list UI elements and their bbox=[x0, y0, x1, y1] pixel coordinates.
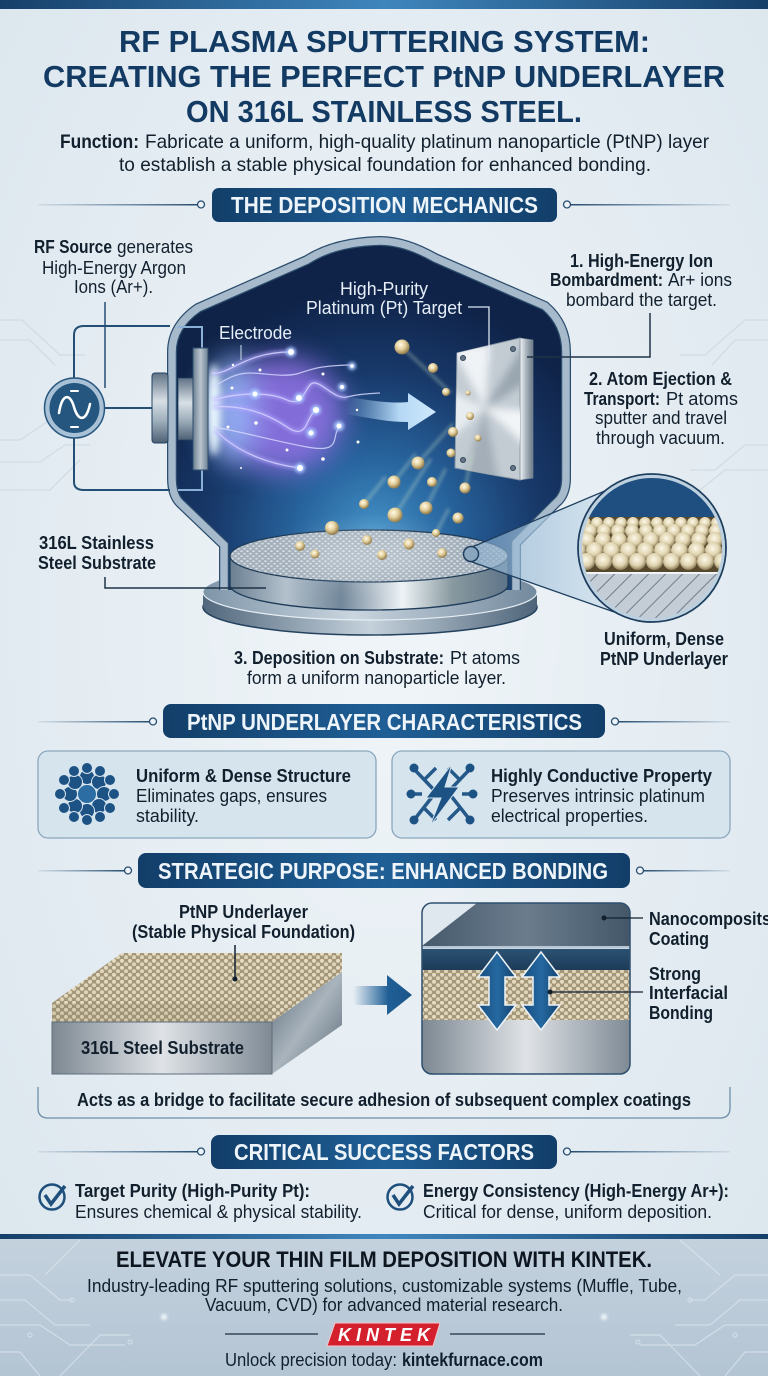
label: step 2: sputter and travel bbox=[595, 408, 727, 428]
sputtered platinum atoms bbox=[295, 340, 482, 560]
arrow: bonding left bbox=[478, 952, 516, 1030]
label: step 2 bbox=[584, 369, 738, 448]
label: step 1: Ar+ ions bbox=[668, 270, 732, 290]
panel: highly conductive property: Highly Conductive Property bbox=[491, 766, 712, 786]
magnifier cone bbox=[472, 490, 637, 620]
title: ON 316L STAINLESS STEEL. bbox=[186, 94, 582, 129]
footer description: Vacuum, CVD) for advanced material research. bbox=[205, 1295, 563, 1315]
title bbox=[43, 24, 725, 129]
function statement: to establish a stable physical foundation for enhanced bonding. bbox=[119, 154, 651, 176]
label: RF source bbox=[34, 237, 193, 388]
label: step 3: form a uniform nanoparticle layer. bbox=[247, 668, 506, 688]
label: underlayer foundation bbox=[132, 902, 355, 942]
icon: conductive network bbox=[406, 764, 478, 826]
function statement: Function: bbox=[60, 131, 139, 153]
section header: characteristics bbox=[38, 704, 730, 738]
label: interfacial bonding: Bonding bbox=[649, 1003, 713, 1023]
label: step 2: 2. Atom Ejection & bbox=[589, 369, 732, 389]
section header: strategic purpose: STRATEGIC PURPOSE: ENHANCED BONDING bbox=[158, 858, 608, 884]
factor: energy consistency: Critical for dense, uniform deposition. bbox=[423, 1202, 712, 1222]
section header: deposition mechanics bbox=[38, 188, 730, 222]
label: uniform underlayer bbox=[600, 629, 728, 669]
label: step 1: 1. High-Energy Ion bbox=[570, 251, 713, 271]
leader: underlayer bbox=[232, 945, 238, 982]
label: step 1: Bombardment: bbox=[550, 270, 663, 290]
electrode bracket bbox=[178, 327, 202, 490]
footer call to action: kintekfurnace.com bbox=[402, 1350, 543, 1370]
label: electrode bbox=[219, 323, 292, 360]
section header: critical success factors bbox=[38, 1135, 730, 1169]
label: step 2: Pt atoms bbox=[666, 389, 738, 409]
title: RF PLASMA SPUTTERING SYSTEM: bbox=[119, 24, 650, 59]
section header: strategic purpose bbox=[38, 853, 730, 888]
label: RF source: generates bbox=[117, 237, 193, 257]
label: step 3 bbox=[234, 648, 520, 688]
callout: bridge statement: Acts as a bridge to facilitate secure adhesion of subsequent complex coatings bbox=[77, 1090, 691, 1110]
footer description bbox=[87, 1276, 682, 1315]
panel: highly conductive property: Preserves intrinsic platinum bbox=[491, 786, 705, 806]
footer heading: ELEVATE YOUR THIN FILM DEPOSITION WITH KINTEK. bbox=[116, 1247, 652, 1272]
plasma sparks bbox=[226, 347, 360, 473]
RF source wiring bbox=[74, 326, 170, 490]
magnifier origin bbox=[464, 546, 478, 562]
label: interfacial bonding: Strong bbox=[649, 964, 701, 984]
platinum target bbox=[454, 337, 534, 481]
footer call to action bbox=[225, 1350, 543, 1370]
label: underlayer foundation: PtNP Underlayer bbox=[179, 902, 308, 922]
logo: KINTEK: KINTEK bbox=[338, 1325, 432, 1345]
label: step 1: bombard the target. bbox=[566, 290, 717, 310]
substrate disc bbox=[230, 530, 508, 610]
magnified view: PtNP layer bbox=[575, 474, 730, 624]
factor: target purity: Ensures chemical & physical stability. bbox=[75, 1202, 362, 1222]
label: substrate: 316L Stainless bbox=[39, 533, 154, 553]
sputtered particle trails bbox=[364, 347, 472, 533]
label: RF source: High-Energy Argon bbox=[42, 258, 186, 278]
label: nanocomposite coating bbox=[602, 909, 768, 949]
label: substrate: Steel Substrate bbox=[38, 553, 156, 573]
panel: footer bbox=[0, 1234, 768, 1376]
label: steel substrate: 316L Steel Substrate bbox=[81, 1038, 244, 1058]
icon: check bbox=[40, 1184, 65, 1210]
section header: critical success factors: CRITICAL SUCCESS FACTORS bbox=[234, 1139, 534, 1165]
label: interfacial bonding bbox=[548, 964, 728, 1023]
panel: uniform and dense structure: Eliminates gaps, ensures bbox=[136, 786, 327, 806]
arrow: process step bbox=[353, 975, 412, 1015]
label: nanocomposite coating: Coating bbox=[649, 929, 709, 949]
plasma glow bbox=[207, 352, 380, 473]
factor: target purity: Target Purity (High-Purity Pt): bbox=[75, 1181, 310, 1201]
callout: bridge statement bbox=[38, 1087, 730, 1118]
factor: target purity bbox=[40, 1181, 362, 1222]
label: target: Platinum (Pt) Target bbox=[306, 298, 462, 318]
label: step 3: 3. Deposition on Substrate: bbox=[234, 648, 444, 668]
icon: check bbox=[388, 1184, 413, 1210]
label: interfacial bonding: Interfacial bbox=[649, 983, 728, 1003]
diagram: coated steel block bbox=[52, 953, 342, 1074]
panel: highly conductive property: electrical properties. bbox=[491, 806, 648, 826]
panel: highly conductive property bbox=[392, 751, 730, 838]
label: target bbox=[306, 279, 489, 362]
label: uniform underlayer: Uniform, Dense bbox=[604, 629, 724, 649]
panel: vacuum chamber bbox=[172, 241, 566, 590]
icon: nanoparticle cluster bbox=[54, 762, 120, 826]
label: step 3: Pt atoms bbox=[450, 648, 520, 668]
label: target: High-Purity bbox=[340, 279, 428, 299]
title: CREATING THE PERFECT PtNP UNDERLAYER bbox=[43, 59, 725, 94]
leader: ion bombardment bbox=[527, 313, 650, 357]
function statement: Fabricate a uniform, high-quality platinum nanoparticle (PtNP) layer bbox=[145, 131, 709, 153]
top bar bbox=[0, 0, 768, 9]
logo: KINTEK bbox=[225, 1323, 545, 1346]
factor: energy consistency bbox=[388, 1181, 729, 1222]
electrode assembly bbox=[152, 348, 208, 470]
footer description: Industry-leading RF sputtering solutions, customizable systems (Muffle, Tube, bbox=[87, 1276, 682, 1296]
label: uniform underlayer: PtNP Underlayer bbox=[600, 649, 728, 669]
label: RF source: RF Source bbox=[34, 237, 112, 257]
panel: uniform and dense structure bbox=[38, 751, 376, 838]
icon: RF source bbox=[44, 378, 104, 438]
arrow: bonding right bbox=[522, 952, 560, 1030]
function statement bbox=[60, 131, 709, 176]
label: RF source: Ions (Ar+). bbox=[74, 277, 153, 297]
factor: energy consistency: Energy Consistency (High-Energy Ar+): bbox=[423, 1181, 729, 1201]
footer call to action: Unlock precision today: bbox=[225, 1350, 397, 1370]
label: substrate bbox=[38, 533, 266, 588]
panel: uniform and dense structure: Uniform & Dense Structure bbox=[136, 766, 351, 786]
section header: deposition mechanics: THE DEPOSITION MECHANICS bbox=[231, 192, 538, 218]
section header: characteristics: PtNP UNDERLAYER CHARACTERISTICS bbox=[187, 709, 582, 735]
label: underlayer foundation: (Stable Physical Foundation) bbox=[132, 922, 355, 942]
label: step 2: Transport: bbox=[584, 389, 660, 409]
label: electrode: Electrode bbox=[219, 323, 292, 343]
panel: uniform and dense structure: stability. bbox=[136, 806, 199, 826]
label: step 1 bbox=[550, 251, 732, 310]
base flange bbox=[203, 564, 537, 635]
diagram: bonded coating section bbox=[422, 903, 630, 1074]
label: step 2: through vacuum. bbox=[596, 428, 725, 448]
arrow: ion flow bbox=[345, 393, 436, 430]
